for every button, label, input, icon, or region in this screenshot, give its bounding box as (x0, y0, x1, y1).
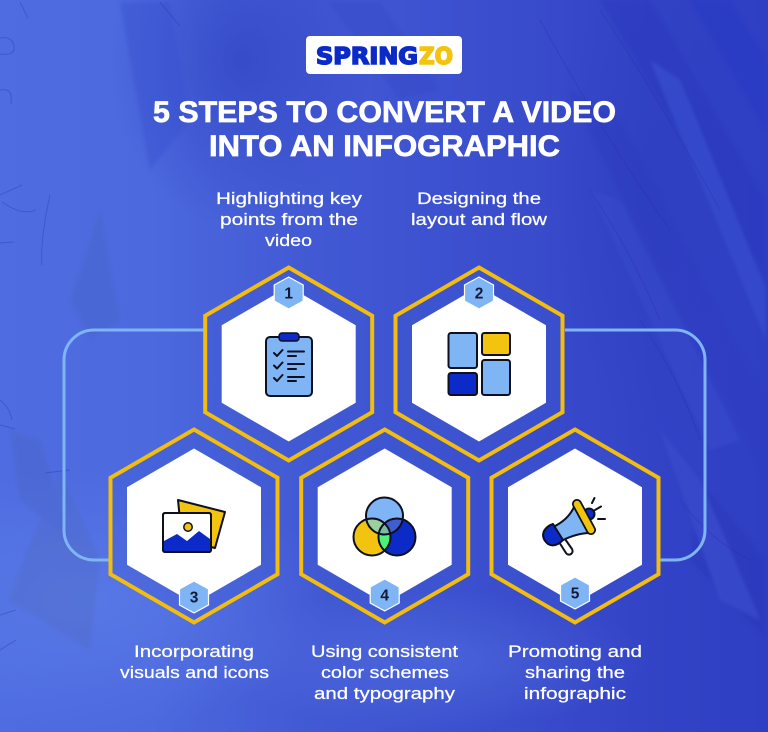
icon: colour venn (354, 498, 416, 556)
label: step 2: layout and flow (411, 210, 548, 229)
badge 2: 2 (475, 286, 483, 302)
label: step 4: color schemes (321, 663, 449, 682)
step 3 hexagon (110, 430, 278, 622)
logo: SPRING (316, 44, 418, 70)
icon: megaphone (543, 498, 605, 555)
label: step 1: Highlighting key (216, 189, 363, 208)
title (153, 96, 616, 163)
badge 3: 3 (190, 590, 199, 606)
badge 4 (370, 579, 399, 611)
label: step 5: Promoting and (508, 642, 642, 661)
connector line (64, 330, 705, 560)
step 1 hexagon (205, 268, 372, 460)
badge 3 (180, 581, 208, 613)
label: step 3: Incorporating (134, 642, 254, 661)
label: step 3 (120, 642, 269, 682)
badge 4: 4 (380, 588, 389, 604)
label: step 5 (508, 642, 642, 703)
badge 1: 1 (284, 286, 293, 302)
logo: ZO (419, 44, 453, 70)
label: step 4: Using consistent (311, 642, 458, 661)
title: INTO AN INFOGRAPHIC (209, 130, 560, 163)
label: step 5: infographic (524, 684, 627, 703)
step 5 hexagon (492, 430, 658, 622)
label: step 5: sharing the (525, 663, 625, 682)
icon: layout grid (448, 333, 510, 395)
label: step 4 (311, 642, 458, 703)
label: step 4: and typography (314, 684, 456, 703)
logo (306, 36, 462, 74)
label: step 2 (411, 189, 548, 229)
label: step 3: visuals and icons (120, 663, 269, 682)
badge 5 (560, 577, 590, 609)
label: step 1: video (265, 231, 312, 250)
badge 5: 5 (571, 586, 580, 602)
badge 1 (274, 277, 303, 309)
step 4 hexagon (301, 430, 468, 622)
badge 2 (464, 277, 494, 309)
label: step 2: Designing the (417, 189, 541, 208)
step 2 hexagon (396, 268, 562, 460)
label: step 1 (216, 189, 363, 250)
icon: clipboard (266, 333, 312, 396)
icon: photos (163, 500, 225, 552)
title: 5 STEPS TO CONVERT A VIDEO (153, 96, 616, 129)
label: step 1: points from the (220, 210, 358, 229)
